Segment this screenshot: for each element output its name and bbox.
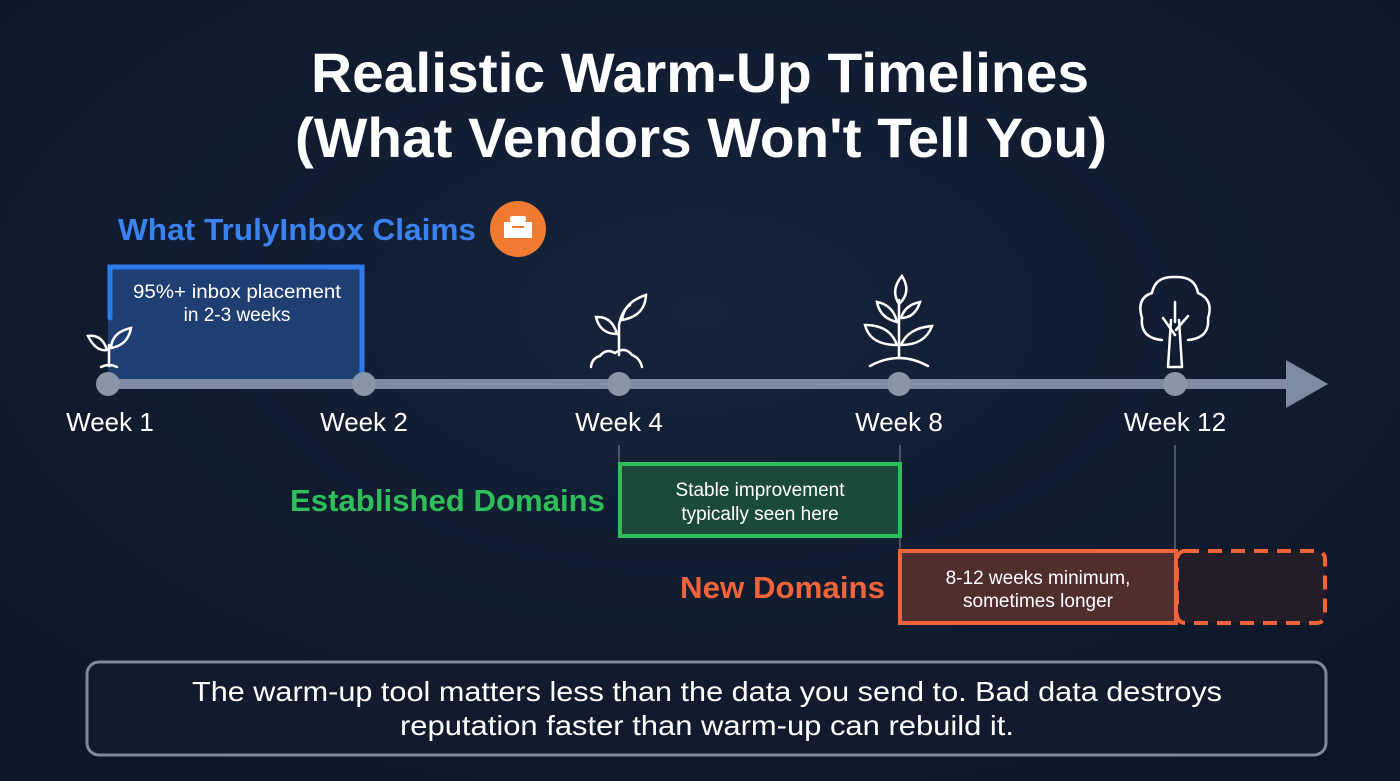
week labels: Week 4 (575, 407, 663, 437)
icon: tree (1140, 277, 1210, 367)
connector lines (619, 445, 1175, 550)
new domains box: 8-12 weeks minimum, (946, 568, 1130, 589)
icon: sprout (88, 328, 131, 367)
timeline arrow (96, 360, 1328, 408)
heading: what trulyinbox claims: What TrulyInbox Claims (118, 212, 476, 247)
claim box: in 2-3 weeks (184, 305, 290, 326)
heading: what trulyinbox claims (118, 201, 546, 257)
week labels: Week 2 (320, 407, 408, 437)
label: established domains: Established Domains (290, 483, 605, 518)
icon: inbox (490, 201, 546, 257)
week labels: Week 12 (1124, 407, 1226, 437)
label: new domains: New Domains (680, 570, 885, 605)
icon: plant (865, 276, 932, 366)
new domains box: sometimes longer (963, 591, 1114, 612)
title: (What Vendors Won't Tell You) (295, 106, 1107, 169)
new domains box (900, 551, 1325, 623)
callout: bottom note: The warm-up tool matters less than the data you send to. Bad data destroys (192, 676, 1222, 707)
callout: bottom note (87, 662, 1326, 755)
established box (620, 464, 900, 536)
title (295, 41, 1107, 169)
callout: bottom note: reputation faster than warm-up can rebuild it. (400, 710, 1014, 741)
week labels (66, 407, 1226, 437)
claim box (108, 265, 364, 384)
icon: seedling in soil (591, 295, 646, 367)
established box: Stable improvement (676, 480, 845, 501)
week labels: Week 1 (66, 407, 154, 437)
established box: typically seen here (681, 504, 839, 525)
week labels: Week 8 (855, 407, 943, 437)
claim box: 95%+ inbox placement (133, 282, 342, 303)
title: Realistic Warm-Up Timelines (311, 41, 1089, 104)
